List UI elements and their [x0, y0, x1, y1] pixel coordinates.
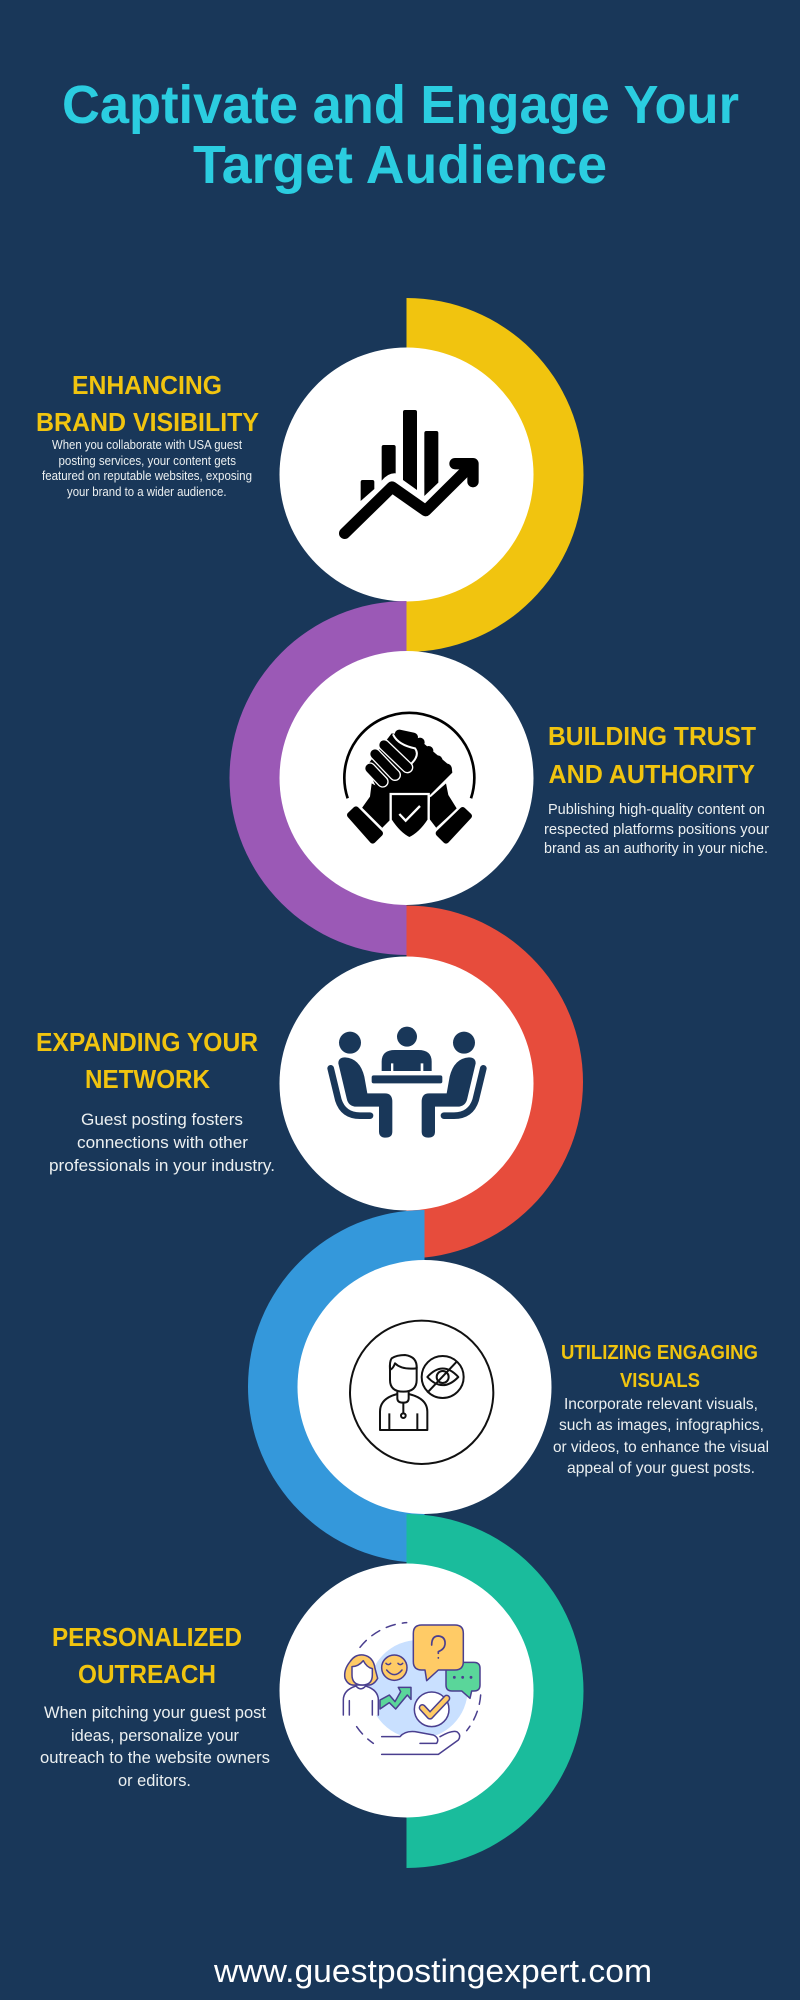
heading: EXPANDING YOUR: [36, 1027, 258, 1057]
heading: [36, 370, 259, 437]
footer website url: www.guestpostingexpert.com: [213, 1953, 652, 1989]
body text: [42, 438, 252, 499]
heading: BRAND VISIBILITY: [36, 407, 259, 437]
body text: posting services, your content gets: [58, 454, 236, 468]
title: Captivate and Engage Your: [62, 75, 739, 135]
panel: personalized outreach: [40, 1514, 584, 1868]
icon: person with crossed-out eye: [350, 1321, 493, 1464]
heading: OUTREACH: [78, 1659, 216, 1689]
white circle: [280, 651, 534, 905]
heading: [52, 1622, 242, 1689]
heading: AND AUTHORITY: [548, 759, 755, 789]
white circle: [280, 1564, 534, 1818]
body text: [49, 1111, 275, 1175]
body text: [40, 1704, 270, 1790]
heading: UTILIZING ENGAGING: [561, 1342, 758, 1364]
panel: utilizing engaging visuals: [248, 1210, 769, 1563]
body text: Publishing high-quality content on: [548, 801, 765, 818]
body text: [553, 1396, 769, 1477]
body text: outreach to the website owners: [40, 1749, 270, 1767]
heading: [36, 1027, 258, 1094]
panel: enhancing brand visibility: [36, 298, 584, 652]
title: Target Audience: [193, 135, 607, 195]
body text: brand as an authority in your niche.: [544, 840, 768, 857]
white circle: [280, 348, 534, 602]
purple half ring: [229, 601, 406, 955]
icon: rising bar chart with arrow: [345, 410, 473, 533]
heading: PERSONALIZED: [52, 1622, 242, 1652]
body text: Incorporate relevant visuals,: [564, 1396, 758, 1413]
white circle: [298, 1260, 552, 1514]
green half ring: [406, 1514, 584, 1868]
body text: connections with other: [77, 1134, 249, 1152]
body text: When you collaborate with USA guest: [52, 438, 242, 452]
body text: such as images, infographics,: [559, 1417, 764, 1434]
body text: professionals in your industry.: [49, 1157, 275, 1175]
white circle: [280, 956, 534, 1210]
heading: BUILDING TRUST: [548, 721, 756, 751]
heading: [548, 721, 756, 789]
body text: or videos, to enhance the visual: [553, 1439, 769, 1456]
body text: When pitching your guest post: [44, 1704, 266, 1722]
red half ring: [406, 906, 583, 1258]
heading: [561, 1342, 758, 1392]
heading: ENHANCING: [72, 370, 222, 400]
body text: your brand to a wider audience.: [67, 485, 226, 499]
blue half ring: [248, 1210, 424, 1563]
body text: ideas, personalize your: [71, 1727, 239, 1745]
body text: appeal of your guest posts.: [567, 1460, 755, 1477]
title: [62, 75, 739, 195]
body text: featured on reputable websites, exposing: [42, 469, 252, 483]
icon: customer feedback illustration: [343, 1623, 481, 1754]
heading: NETWORK: [85, 1064, 210, 1094]
panel: expanding your network: [36, 906, 583, 1258]
body text: Guest posting fosters: [81, 1111, 243, 1129]
panel: building trust and authority: [229, 601, 769, 955]
body text: respected platforms positions your: [544, 821, 769, 838]
yellow half ring: [406, 298, 584, 652]
icon: people at a table: [331, 1027, 483, 1138]
heading: VISUALS: [620, 1370, 700, 1392]
icon: handshake with shield: [344, 713, 474, 841]
body text: or editors.: [118, 1772, 191, 1790]
body text: [544, 801, 769, 857]
